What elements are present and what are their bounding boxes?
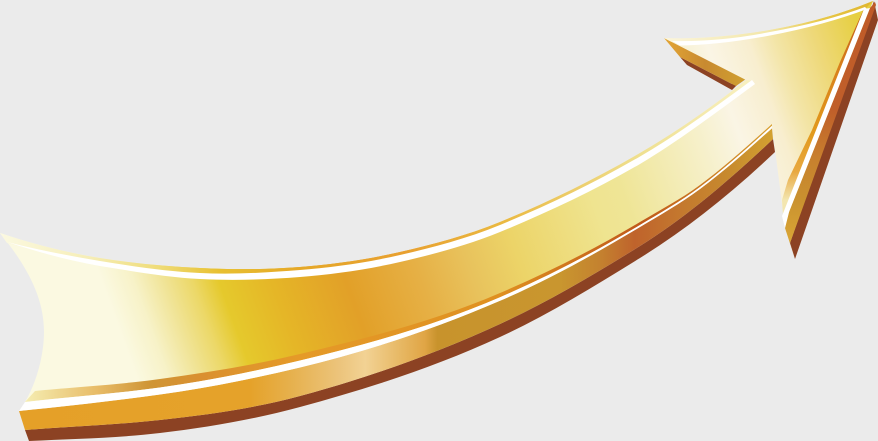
top rim of the shaft (0, 80, 752, 275)
barb underside: gold and brown extrusion (664, 38, 746, 90)
arrow head side: brown edge (790, 1, 878, 259)
highlight: lower white line (19, 126, 772, 411)
highlight: upper white line (7, 80, 755, 280)
highlight: white line on arrow head top (672, 7, 867, 46)
arrow head side: orange to gold band (785, 2, 876, 259)
shaft extrusion: gold band (19, 128, 773, 430)
highlight: white line on arrow head right side (782, 8, 870, 228)
shaft extrusion: brown lower edge (25, 139, 775, 441)
top rim of the arrow head (664, 1, 873, 42)
arrow head inner orange strip (782, 9, 864, 216)
inner orange strip above lower highlight (25, 124, 772, 402)
